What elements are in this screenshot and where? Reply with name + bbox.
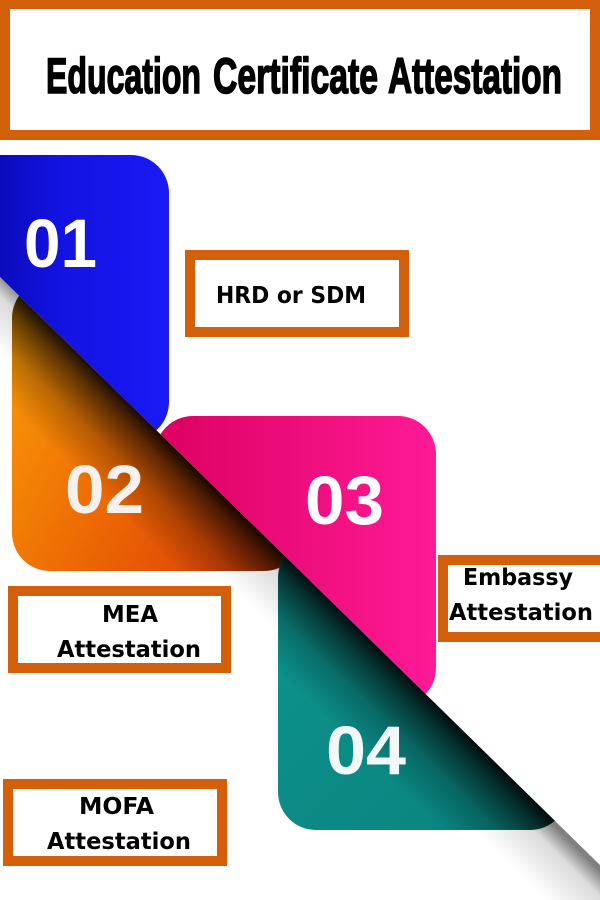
panel: step 01 blue card [0, 155, 169, 440]
label box: Embassy Attestation: Attestation [449, 598, 593, 626]
label box: MOFA Attestation: MOFA [79, 792, 155, 820]
label box: MEA Attestation: Attestation [57, 635, 201, 663]
panel: step 03 pink card [155, 416, 436, 706]
title: Education [46, 48, 201, 104]
title box [5, 4, 595, 135]
number 02: 02 [65, 451, 144, 528]
label box: Embassy Attestation: Embassy [463, 563, 573, 591]
label box: Embassy Attestation [443, 560, 600, 637]
number 04: 04 [326, 712, 406, 789]
number 01: 01 [24, 205, 97, 282]
label box: MOFA Attestation [8, 784, 222, 861]
label box: MEA Attestation: MEA [102, 600, 159, 628]
label box: HRD or SDM: HRD or SDM [216, 281, 366, 309]
diagonal paper-fold shadow [0, 270, 600, 900]
label box: HRD or SDM [190, 255, 404, 332]
panel: step 02 orange card [12, 280, 302, 571]
panel: step 04 teal card [278, 540, 568, 830]
label box: MEA Attestation [13, 591, 226, 668]
title: Certificate [213, 48, 378, 104]
number 03: 03 [305, 462, 384, 539]
label box: MOFA Attestation: Attestation [47, 827, 191, 855]
